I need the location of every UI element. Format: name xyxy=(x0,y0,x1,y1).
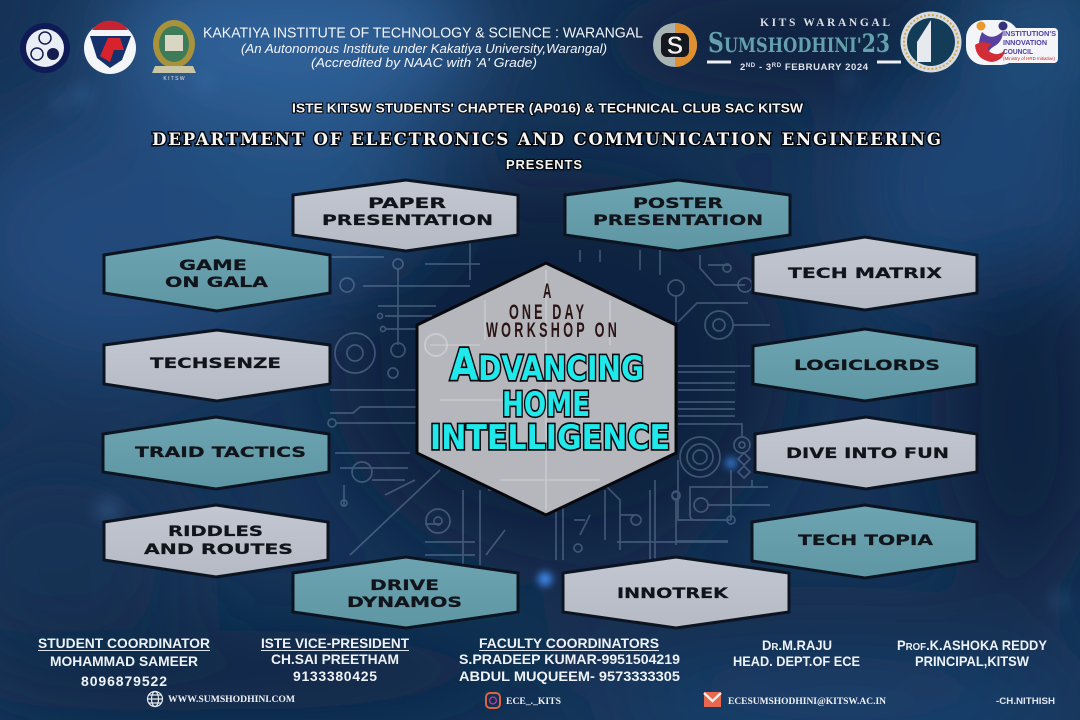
hexagon: Paper Presentation: PRESENTATION xyxy=(322,213,493,229)
event title: Sumshodhini'23: FEBRUARY 2024 xyxy=(782,62,869,73)
head of department xyxy=(733,637,860,669)
hexagon: Tech Matrix: TECH MATRIX xyxy=(788,266,942,282)
event title: Sumshodhini'23 xyxy=(707,17,901,73)
right xyxy=(676,296,770,437)
glow spots xyxy=(53,73,1068,608)
ISTE vice-president xyxy=(261,635,409,684)
institute heading xyxy=(203,24,643,70)
email: ECESUMSHODHINI@KITSW.AC.IN xyxy=(728,697,886,707)
principal: PROF.K.ASHOKA REDDY xyxy=(897,637,1048,653)
ISTE vice-president: ISTE VICE-PRESIDENT xyxy=(261,635,409,651)
workshop intro text: A xyxy=(543,279,552,303)
logo: Institution's Innovation Council: INNOVATION xyxy=(1003,40,1047,47)
logo: KITS seal: K I T S W xyxy=(163,76,185,82)
logo: Institution's Innovation Council: INSTITUTION'S xyxy=(1003,31,1056,38)
website xyxy=(148,692,295,706)
hexagon: Techsenze: TECHSENZE xyxy=(150,356,281,372)
icon: mail xyxy=(704,692,721,707)
event title: Sumshodhini'23: RD xyxy=(772,63,782,69)
workshop intro text: ONE DAY xyxy=(509,300,584,324)
hexagon: Traid Tactics xyxy=(103,417,329,489)
hexagon: Riddles and Routes xyxy=(104,505,328,577)
hexagon: Riddles and Routes: RIDDLES xyxy=(168,524,263,540)
logo: association seal xyxy=(900,12,962,72)
central hexagon: workshop title xyxy=(417,263,676,515)
hexagon: Dive Into Fun: DIVE INTO FUN xyxy=(786,446,949,462)
principal: PRINCIPAL,KITSW xyxy=(915,653,1030,669)
institute heading: (Accredited by NAAC with 'A' Grade) xyxy=(311,55,537,70)
hexagon: Riddles and Routes: AND ROUTES xyxy=(144,542,293,558)
workshop title text: ADVANCING xyxy=(450,340,644,391)
student coordinator: 8096879522 xyxy=(81,673,167,689)
student coordinator: MOHAMMAD SAMEER xyxy=(50,653,198,669)
hexagon: Drive Dynamos xyxy=(293,557,518,628)
hexagon: Paper Presentation: PAPER xyxy=(368,196,446,212)
presents: PRESENTS xyxy=(506,157,582,172)
hexagon: Game on Gala xyxy=(104,237,330,311)
hexagon: Drive Dynamos: DRIVE xyxy=(370,578,439,594)
event title: Sumshodhini'23: ND xyxy=(746,63,756,69)
top xyxy=(480,200,660,275)
principal xyxy=(897,637,1048,669)
bottom xyxy=(425,430,728,565)
hexagon: Poster Presentation: POSTER xyxy=(633,196,723,212)
email xyxy=(704,692,886,707)
workshop intro text: WORKSHOP ON xyxy=(486,318,617,342)
hexagon: Tech Topia: TECH TOPIA xyxy=(798,533,934,549)
logo: KITS seal xyxy=(152,20,196,82)
logo: Institution's Innovation Council: COUNCIL xyxy=(1003,49,1034,56)
workshop title text: HOME xyxy=(502,385,590,425)
hexagon: Techsenze xyxy=(104,330,330,401)
event title: Sumshodhini'23: KITS WARANGAL xyxy=(760,17,890,29)
ISTE vice-president: CH.SAI PREETHAM xyxy=(271,651,399,667)
hexagon: Logiclords: LOGICLORDS xyxy=(794,358,940,374)
student coordinator: STUDENT COORDINATOR xyxy=(38,635,210,651)
student coordinator xyxy=(38,635,210,689)
hexagon: Paper Presentation xyxy=(293,180,518,251)
hexagon: Innotrek xyxy=(563,557,789,628)
website: WWW.SUMSHODHINI.COM xyxy=(168,695,295,705)
hexagon: Logiclords xyxy=(753,329,977,401)
institute heading: (An Autonomous Institute under Kakatiya University,Warangal) xyxy=(241,41,607,56)
event title: Sumshodhini'23: - 3 xyxy=(756,62,771,73)
head of department: DR.M.RAJU xyxy=(762,637,832,653)
department heading: DEPARTMENT OF ELECTRONICS AND COMMUNICATION ENGINEERING xyxy=(152,130,941,149)
instagram: ECE_._KITS xyxy=(506,697,561,707)
hexagon: Poster Presentation: PRESENTATION xyxy=(593,213,763,229)
logo: Institution's Innovation Council xyxy=(966,20,1058,65)
logo: Sumshodhini gear xyxy=(653,23,697,67)
instagram xyxy=(486,693,561,708)
hexagon: Game on Gala: GAME xyxy=(179,258,247,274)
event title: Sumshodhini'23: SUMSHODHINI'23 xyxy=(708,28,890,59)
logo: technical club shield xyxy=(84,21,136,74)
credit: -CH.NITHISH xyxy=(996,696,1055,706)
faculty coordinators: S.PRADEEP KUMAR-9951504219 xyxy=(459,651,680,667)
logo: Sumshodhini gear: S xyxy=(667,32,683,60)
faculty coordinators: FACULTY COORDINATORS xyxy=(479,635,659,651)
left xyxy=(330,238,480,468)
institute heading: KAKATIYA INSTITUTE OF TECHNOLOGY & SCIENCE : WARANGAL xyxy=(203,24,643,42)
workshop title text: INTELLIGENCE xyxy=(430,418,670,458)
hexagon: Game on Gala: ON GALA xyxy=(165,275,269,291)
icon: globe xyxy=(148,692,162,706)
head of department: HEAD. DEPT.OF ECE xyxy=(733,653,860,669)
faculty coordinators xyxy=(459,635,680,684)
hexagon: Tech Matrix xyxy=(753,237,977,310)
hexagon: Tech Topia xyxy=(752,505,977,578)
ISTE vice-president: 9133380425 xyxy=(293,668,377,684)
hexagon: Dive Into Fun xyxy=(755,417,977,489)
workshop intro text xyxy=(486,279,617,342)
faculty coordinators: ABDUL MUQUEEM- 9573333305 xyxy=(459,668,680,684)
circuit board pattern xyxy=(328,200,770,565)
logo: ISTE xyxy=(20,23,70,73)
hexagon: Drive Dynamos: DYNAMOS xyxy=(347,595,462,611)
workshop title text xyxy=(430,340,670,458)
logo: Institution's Innovation Council: (Ministry of HRD Initiative) xyxy=(1003,56,1055,61)
icon: instagram xyxy=(486,693,500,708)
hexagon: Poster Presentation xyxy=(565,180,790,251)
hexagon: Innotrek: INNOTREK xyxy=(617,586,729,602)
chapter line: ISTE KITSW STUDENTS' CHAPTER (AP016) & TECHNICAL CLUB SAC KITSW xyxy=(292,100,804,116)
event title: Sumshodhini'23: 2 xyxy=(740,62,745,73)
hexagon: Traid Tactics: TRAID TACTICS xyxy=(135,445,306,461)
